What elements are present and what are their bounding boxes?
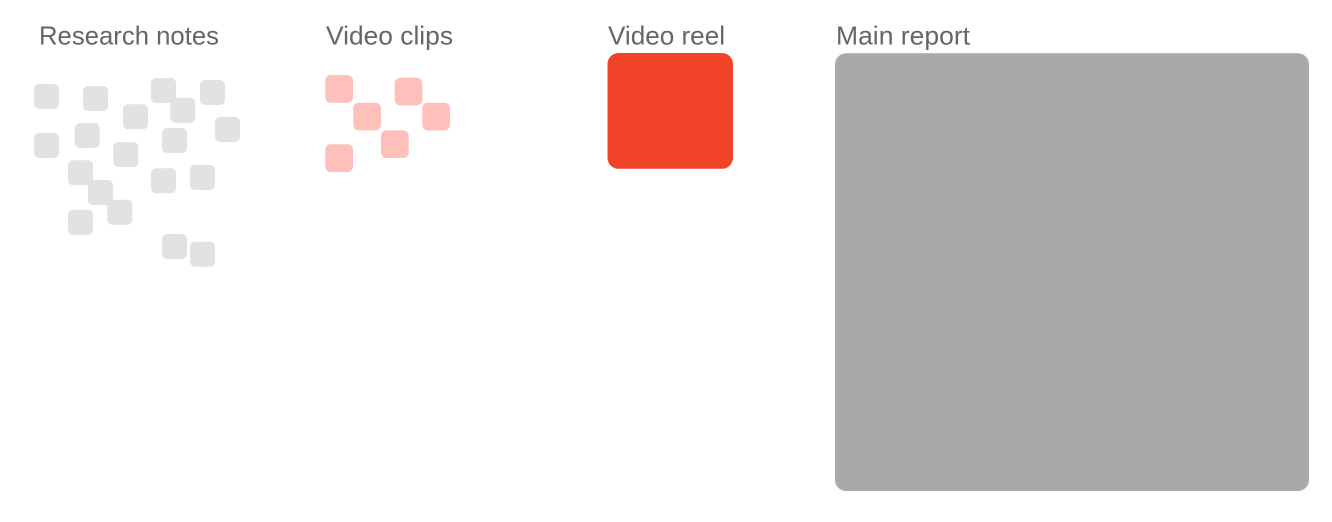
group: grey note squares xyxy=(34,78,240,267)
panel: main report xyxy=(835,20,1309,491)
panel: video reel xyxy=(608,20,733,169)
heading: main report: Main report xyxy=(836,20,971,50)
group: pink clip squares xyxy=(325,75,450,172)
heading: video reel: Video reel xyxy=(608,20,725,50)
red reel block xyxy=(608,53,733,169)
heading: video clips: Video clips xyxy=(326,20,453,50)
grey report block xyxy=(835,53,1309,491)
panel: video clips xyxy=(325,20,453,172)
panel: research notes xyxy=(34,20,240,267)
heading: research notes: Research notes xyxy=(39,20,219,50)
